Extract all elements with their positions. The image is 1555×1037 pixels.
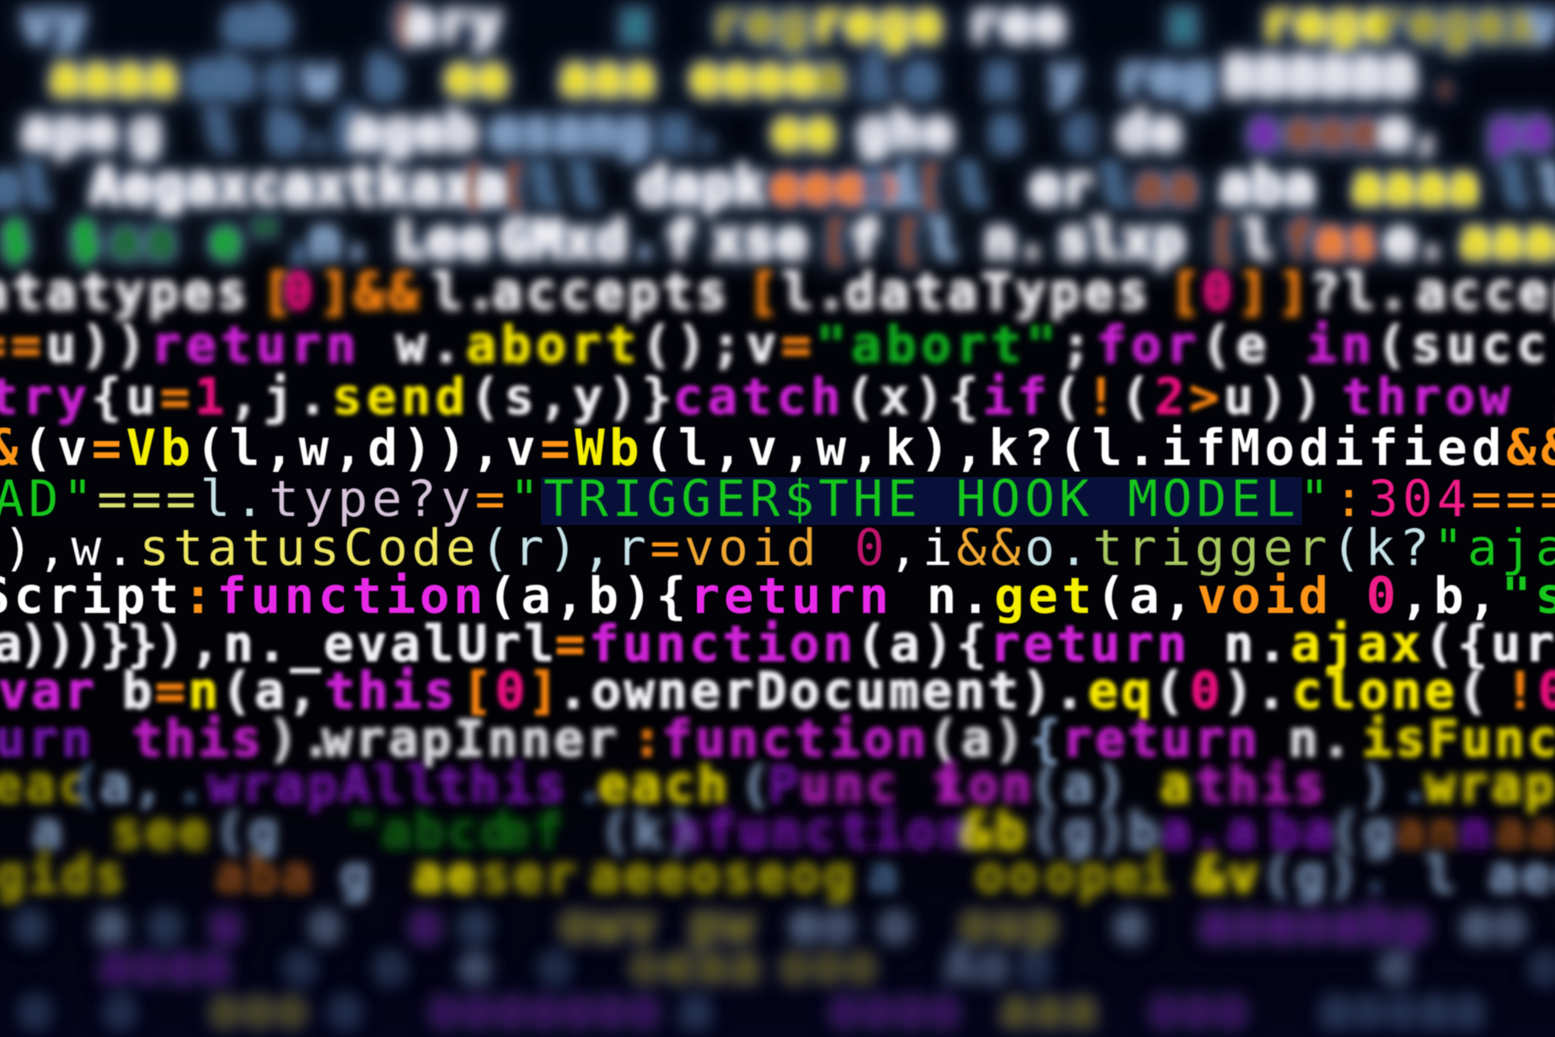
code row: second line: y	[1050, 48, 1082, 106]
code row: fifth line: e.	[1385, 211, 1449, 269]
code row: wrapInner line: ).	[268, 710, 334, 768]
code row: second line: ab	[190, 48, 254, 106]
code row: lower blurred line: eo	[790, 895, 856, 953]
code row: olive line: oo	[975, 846, 1041, 904]
code row: bottom line: aooaa	[1320, 980, 1486, 1037]
code row: second line: i	[860, 48, 892, 106]
code row: green and orange line: (g	[1330, 802, 1396, 860]
code row: return w.abort line: ==u))return w.abort();v="abort";for(e in(succ	[0, 316, 1551, 374]
code row: third line: esang	[490, 102, 651, 160]
code row: bottom line: aaa	[1000, 980, 1099, 1037]
code row: green and orange line: func	[705, 802, 837, 860]
code row: fourth line: l	[570, 157, 602, 215]
code row: second line: w	[305, 48, 337, 106]
code row: fifth line: xse	[712, 211, 808, 269]
code row: fourth line: [	[498, 157, 530, 215]
code row: purple and yellow line: this	[436, 756, 568, 814]
code row: green and orange line: n	[1460, 802, 1493, 860]
code row: fifth line: Lee	[395, 211, 491, 269]
code row: fifth line: [	[1208, 211, 1240, 269]
code row: lower blurred line: owv	[560, 895, 659, 953]
code row: statusCode line: ),w.statusCode(r),r=void 0,i&&o.trigger(k?"aja	[3, 519, 1555, 577]
code row: fifth line: f	[1283, 211, 1315, 269]
code row: purple and yellow line: a,	[100, 756, 166, 814]
code row: fourth line: l	[22, 157, 54, 215]
code row: fifth line: GMxd	[500, 211, 628, 269]
code row: third line: eee	[1285, 102, 1381, 160]
code row: third line: ageb	[350, 102, 478, 160]
code row: third line: a	[1248, 102, 1280, 160]
code row: dataTypes line: accepts	[492, 263, 731, 321]
code row: ownerDocument line: .ownerDocument).	[558, 662, 1088, 720]
code row: dataTypes line: &&	[354, 263, 422, 321]
code row: lower blurred line 2: e	[1380, 936, 1413, 994]
code row: fourth line: aa	[1135, 157, 1199, 215]
code row: second line: reg	[1118, 48, 1214, 106]
code row: fourth line: e	[860, 157, 892, 215]
code row: dataTypes line: 0	[1202, 263, 1236, 321]
code row: dataTypes line: l.	[432, 263, 500, 321]
code row: olive line: (g)	[1262, 846, 1361, 904]
code row: evalUrl line: =	[555, 615, 588, 673]
code row: olive line: og	[790, 846, 856, 904]
code row: fifth line: n.	[310, 211, 374, 269]
code row: function get line: Script:function(a,b){return n.get(a,void 0,b,"s	[0, 567, 1555, 625]
code row: fifth line: n.	[985, 211, 1049, 269]
code row: purple and yellow line: a	[1160, 756, 1193, 814]
code row: wrapInner line: n.	[1288, 710, 1354, 768]
code row: third line: de	[1118, 102, 1182, 160]
headline: TRIGGER$THE HOOK MODEL: AD"===l.type?y="TRIGGER$THE HOOK MODEL":304===	[0, 470, 1555, 528]
code row: wrapInner line: ion	[830, 710, 929, 768]
code row: fifth line: l	[928, 211, 960, 269]
code row: evalUrl line: (a){return n.ajax({ur	[856, 615, 1555, 673]
code row: wrapInner line: this	[132, 710, 264, 768]
code row: purple and yellow line: .	[175, 756, 208, 814]
code row: bottom line: o	[330, 980, 363, 1037]
code row: purple and yellow line: wrapAll	[208, 756, 440, 814]
code row: green and orange line: (g)	[1030, 802, 1129, 860]
code row: purple and yellow line: .	[1400, 756, 1433, 814]
code row: lower blurred line 2: aoea	[100, 936, 232, 994]
code row: lower blurred line: e	[1115, 895, 1148, 953]
code row: wrapInner line: funct	[662, 710, 828, 768]
code row: ownerDocument line: eq	[1088, 662, 1154, 720]
code row: lower blurred line 2: Ao	[945, 936, 1011, 994]
code row: dataTypes line: 0	[283, 263, 317, 321]
code row: fifth line: $	[70, 211, 102, 269]
code row: bottom line: ooo	[210, 980, 309, 1037]
code row: olive line: .	[1360, 846, 1393, 904]
code row: fourth line: l	[530, 157, 562, 215]
code row: dataTypes line: l.	[782, 263, 850, 321]
code row: green and orange line: ef	[500, 802, 566, 860]
code row: fifth line: e	[210, 211, 242, 269]
code row: fourth line: l	[958, 157, 990, 215]
code row: fifth line: a	[110, 211, 142, 269]
code row: ownerDocument line: !	[1505, 662, 1538, 720]
code row: green and orange line: tion	[840, 802, 972, 860]
code row: bottom line: a	[680, 980, 713, 1037]
code row: fifth line: as	[1315, 211, 1379, 269]
code row: dataTypes line: ]	[1238, 263, 1272, 321]
code row: fifth line: "	[250, 211, 282, 269]
code row: fourth line: eeee	[770, 157, 898, 215]
code row: try send catch line: throw	[1342, 368, 1514, 426]
code row: ownerDocument line: this	[325, 662, 457, 720]
code row: second line: b	[370, 48, 402, 106]
code row: lower blurred line: eo	[1462, 895, 1528, 953]
code row: green and orange line: (k)	[600, 802, 699, 860]
code row: lower blurred line 2: ooo	[780, 936, 879, 994]
code row: green and orange line: an	[1395, 802, 1461, 860]
code row: ownerDocument line: [	[462, 662, 495, 720]
code row: lower blurred line 2: e	[460, 936, 493, 994]
code row: purple and yellow line: (	[70, 756, 103, 814]
code row: lower blurred line: pw	[690, 895, 756, 953]
code row: try send catch line: (x){if(!(2>u))	[845, 368, 1327, 426]
code row: lower blurred line: o	[310, 895, 343, 953]
code row: second line: aaaa	[50, 48, 178, 106]
code row: purple and yellow line: unc t	[800, 756, 966, 814]
code row: fifth line: $	[0, 211, 32, 269]
code row: third line: g	[130, 102, 162, 160]
code row: ownerDocument line: =n(a,	[155, 662, 321, 720]
code row: dataTypes line: ]	[320, 263, 354, 321]
code row: third line: ghe	[858, 102, 954, 160]
code row: olive line: g	[340, 846, 373, 904]
code row: bottom line: ooooooo	[430, 980, 662, 1037]
code row: fifth line: slxp	[1058, 211, 1186, 269]
code row: lower blurred line: o	[880, 895, 913, 953]
code row: lower blurred line: o	[410, 895, 443, 953]
code row: fourth line: l	[1100, 157, 1132, 215]
code row: purple and yellow line: (a)	[1030, 756, 1129, 814]
code row: fifth line: f	[665, 211, 697, 269]
code row: olive line: ope	[1045, 846, 1144, 904]
code row: third line: s	[990, 102, 1022, 160]
code row: dataTypes line: ]	[1278, 263, 1312, 321]
code row: olive line: ae	[413, 846, 479, 904]
code row: ownerDocument line: clone	[1292, 662, 1458, 720]
code row: bottom line: o	[105, 980, 138, 1037]
code row: fourth line: l	[1500, 157, 1532, 215]
code row: second line: aaa	[560, 48, 656, 106]
code row: purple and yellow line: each	[598, 756, 730, 814]
code row: lower blurred line: aoeoabp	[1200, 895, 1432, 953]
code row: green and orange line: "abcd	[348, 802, 514, 860]
code row: green and orange line: ba	[1270, 802, 1336, 860]
code row: bottom line: o	[20, 980, 53, 1037]
code row: olive line: a	[868, 846, 901, 904]
code row: fourth line: Aegaxcaxtkaxa	[90, 157, 507, 215]
code row: purple and yellow line: (	[740, 756, 773, 814]
code row: lower blurred line: oup	[960, 895, 1059, 953]
code row: fourth line: [	[458, 157, 490, 215]
code row: green and orange line: a.a	[1160, 802, 1259, 860]
code row: dataTypes line: [	[262, 263, 296, 321]
code row: fourth line: er	[1030, 157, 1094, 215]
code row: dataTypes line: dataTypes	[845, 263, 1152, 321]
code row: ownerDocument line: (	[1458, 662, 1491, 720]
code row: fourth line: dapk	[638, 157, 766, 215]
code row: second line: ee	[445, 48, 509, 106]
code row: olive line: aeeo	[590, 846, 722, 904]
code row: dataTypes line: ?l.	[1310, 263, 1412, 321]
code row: second line: .	[1430, 48, 1462, 106]
code row: second line: a	[905, 48, 937, 106]
code row: lower blurred line: o	[150, 895, 183, 953]
code row: fifth line: ,	[285, 211, 317, 269]
code row: fifth line: f	[850, 211, 882, 269]
code row: second line: BBBBBB	[1225, 48, 1418, 106]
code row: evalUrl line: ,n._evalUrl	[190, 615, 557, 673]
code row: lower blurred line 2: o	[375, 936, 408, 994]
code row: fifth line: l	[1243, 211, 1275, 269]
code row: lower blurred line: u	[210, 895, 243, 953]
code row: ownerDocument line: var	[0, 662, 97, 720]
code row: green and orange line: b	[1128, 802, 1161, 860]
code row: second line: x	[985, 48, 1017, 106]
code row: third line: ee	[772, 102, 836, 160]
code row: try send catch line: catch	[673, 368, 845, 426]
code row: lower blurred line 2: oeaa	[630, 936, 762, 994]
code row: wrapInner line: wrapInner	[322, 710, 620, 768]
code row: bottom line: ooo	[1150, 980, 1249, 1037]
code row: ownerDocument line: ).	[1223, 662, 1289, 720]
code row: third line: b.i	[270, 102, 366, 160]
code row: ownerDocument line: b	[122, 662, 155, 720]
code row: dataTypes line: [	[748, 263, 782, 321]
code row: green and orange line: see	[112, 802, 211, 860]
code row: fourth line: aaaa	[1352, 157, 1480, 215]
code row: ownerDocument line: 0	[1190, 662, 1223, 720]
code row: wrapInner line: isFunc	[1362, 710, 1555, 768]
code row: lower blurred line 2: o	[285, 936, 318, 994]
code row: lower blurred line: o	[460, 895, 493, 953]
code row: olive line: ser	[480, 846, 579, 904]
code row: green and orange line: a	[32, 802, 65, 860]
code row: fifth line: .	[630, 211, 662, 269]
code row: bottom line: oooo	[830, 980, 962, 1037]
code row: try send catch line: {u=1,j.send(s,y)}	[91, 368, 676, 426]
code row: second line: a	[815, 48, 847, 106]
code row: dataTypes line: [	[1170, 263, 1204, 321]
code row: lower blurred line 2: o	[1020, 936, 1053, 994]
code row: wrapInner line: {	[1030, 710, 1063, 768]
code row: fourth line: i	[890, 157, 922, 215]
code row: second line: c	[265, 48, 297, 106]
code row: green and orange line: &b	[962, 802, 1028, 860]
code row: lower blurred line: a	[95, 895, 128, 953]
code row: lower blurred line 2: o	[540, 936, 573, 994]
code row: third line: pa	[1490, 102, 1554, 160]
code row: second line: eeee	[690, 48, 818, 106]
code row: ifModified line: &(v=Vb(l,w,d)),v=Wb(l,v,w,k),k?(l.ifModified&&	[0, 419, 1555, 477]
code row: olive line: i	[1140, 846, 1173, 904]
code row: purple and yellow line: P	[768, 756, 801, 814]
code row: third line: ape	[22, 102, 118, 160]
code row: wrapInner line: :	[632, 710, 665, 768]
code row: lower blurred line: o	[15, 895, 48, 953]
code row: purple and yellow line: ion	[935, 756, 1034, 814]
code row: fifth line: a	[145, 211, 177, 269]
code row: purple and yellow line: )	[1360, 756, 1393, 814]
code row: fourth line: [	[915, 157, 947, 215]
code row: purple and yellow line: .	[575, 756, 608, 814]
code row: ownerDocument line: (	[1154, 662, 1187, 720]
code row: wrapInner line: (a)	[928, 710, 1027, 768]
code row: olive line: &v	[1195, 846, 1261, 904]
code row: fifth line: [	[820, 211, 852, 269]
code row: fifth line: [	[893, 211, 925, 269]
selection highlight	[541, 477, 1302, 525]
code row: olive line: aba	[215, 846, 314, 904]
code row: green and orange line: n	[672, 802, 705, 860]
code row: green and orange line: (g	[215, 802, 281, 860]
code row: purple and yellow line: wrap	[1425, 756, 1555, 814]
code row: purple and yellow line: this	[1195, 756, 1327, 814]
code row: olive line: l	[1425, 846, 1458, 904]
code row: evalUrl line: function	[589, 615, 856, 673]
code row: third line: e,	[1380, 102, 1444, 160]
code row: third line: l	[205, 102, 237, 160]
code row: olive line: ose	[690, 846, 789, 904]
code row: third line: c	[1065, 102, 1097, 160]
code row: third line: x.	[660, 102, 724, 160]
code row: ownerDocument line: 0]	[495, 662, 561, 720]
code row: wrapInner line: return	[1062, 710, 1261, 768]
code row: fourth line: aba	[1220, 157, 1316, 215]
